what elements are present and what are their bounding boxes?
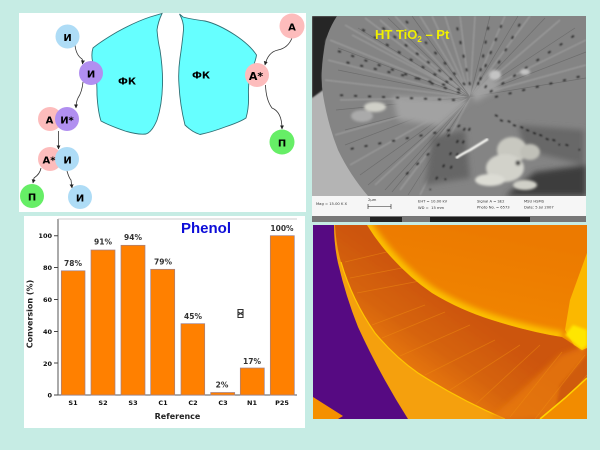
panel: false-colour micrograph: [313, 222, 587, 419]
y axis tick labels: 40: [43, 328, 52, 336]
x axis category labels: C2: [188, 399, 198, 407]
node: И bottom: И: [76, 194, 84, 204]
bar value labels: 79%: [154, 258, 172, 266]
micro: yellow wedge: [565, 253, 587, 350]
y axis tick labels: 0: [47, 392, 52, 400]
node: И excited on surface: И: [87, 70, 95, 80]
node: А* and И pair: [38, 147, 79, 171]
SEM: white streak: [456, 139, 488, 158]
chart title: Phenol: [181, 220, 231, 237]
arrows: [33, 38, 292, 188]
bar value labels: 91%: [94, 238, 112, 246]
node: И bottom: [68, 185, 92, 209]
SEM: info strip: Date: 5 Jul 2007: [524, 206, 554, 210]
x axis category labels: S2: [98, 399, 108, 407]
bars: [61, 236, 294, 395]
node: И excited on surface: [79, 61, 103, 85]
SEM: info strip: [312, 196, 586, 216]
y axis tick labels: 60: [43, 296, 52, 304]
micro: lower right piece: [540, 378, 587, 419]
label: right ФК: ФК: [192, 70, 211, 82]
SEM: info strip: MSU HSMS: [524, 200, 545, 204]
micro: lower left piece: [313, 397, 343, 419]
x axis category labels: S1: [68, 399, 78, 407]
y axis tick labels: 100: [38, 232, 52, 240]
label: left ФК: ФК: [118, 76, 137, 88]
node: А* on surface: А*: [249, 70, 263, 83]
panel: SEM micrograph HT TiO2-Pt: [312, 16, 586, 222]
node: П left: П: [28, 192, 36, 204]
x axis category labels: C1: [158, 399, 168, 407]
SEM: fine streaks: [336, 16, 586, 195]
bar value labels: 100%: [270, 224, 294, 233]
SEM: info strip: Mag = 15.00 K X: [316, 202, 348, 206]
x axis category labels: S3: [128, 399, 138, 407]
node: А* on surface: [245, 63, 269, 87]
small mark: boxed glyph: [238, 310, 243, 318]
SEM: dark pores: [335, 16, 586, 190]
SEM: info strip: 2μm: [368, 198, 377, 202]
x axis category labels: C3: [218, 399, 228, 407]
node: И top: И: [63, 33, 72, 44]
y axis title: Conversion (%): [26, 280, 34, 348]
SEM: title label: – Pt: [422, 27, 450, 42]
SEM: sliced disk: [312, 16, 586, 198]
node: А and И* pair: А: [46, 116, 54, 126]
bar value labels: [64, 224, 294, 390]
bar value labels: 94%: [124, 233, 142, 242]
SEM: info strip: Photo No. = 6573: [477, 206, 510, 210]
particle: right photocatalyst: [179, 14, 256, 134]
y axis tick labels: [38, 232, 52, 400]
x axis category labels: P25: [275, 399, 289, 407]
micro: outer rim: [334, 225, 504, 419]
SEM: bright deposits: [351, 69, 540, 190]
x axis category labels: N1: [247, 399, 257, 407]
node: А and И* pair: И*: [60, 116, 75, 126]
bar value labels: 17%: [243, 357, 261, 366]
micro: lighter fibres: [345, 250, 587, 419]
node: П right: П: [278, 138, 286, 150]
SEM: info strip: Signal A = SE2: [477, 200, 504, 204]
panel: phenol conversion bar chart: [24, 216, 305, 428]
SEM: info strip: EHT = 10.00 kV: [418, 200, 448, 204]
SEM: title label: HT TiO: [375, 27, 417, 42]
bar value labels: 2%: [216, 380, 229, 390]
SEM: dark corner: [312, 16, 337, 98]
micro: upper sphere: [367, 225, 587, 350]
bar value labels: 78%: [64, 259, 82, 268]
SEM: title label: 2: [417, 35, 422, 44]
x axis title: Reference: [155, 412, 201, 421]
micro: fibrous band: [335, 225, 587, 419]
node: А and И* pair: [38, 107, 79, 131]
y axis tick labels: 80: [43, 264, 52, 272]
particle: left photocatalyst: [92, 14, 163, 134]
node: И top: [56, 24, 80, 48]
x axis category labels: [68, 399, 289, 407]
node: А* and И pair: А*: [43, 156, 56, 166]
SEM: info strip: WD = 15 mm: [418, 206, 445, 210]
axes: [58, 219, 297, 395]
SEM: bottom dark strip: [312, 216, 586, 222]
node: П right: [270, 130, 294, 154]
node: А right: А: [288, 22, 296, 34]
SEM: tonal regions: [392, 72, 586, 196]
y axis tick labels: 20: [43, 360, 52, 368]
node: А right: [280, 14, 304, 38]
micro: lower orange fibre region: [490, 345, 587, 419]
bar value labels: 45%: [184, 312, 202, 321]
SEM: light fibres: [325, 16, 586, 195]
panel: photocatalysis mechanism diagram: [19, 13, 306, 212]
node: А* and И pair: И: [63, 156, 72, 166]
node: П left: [20, 184, 44, 208]
